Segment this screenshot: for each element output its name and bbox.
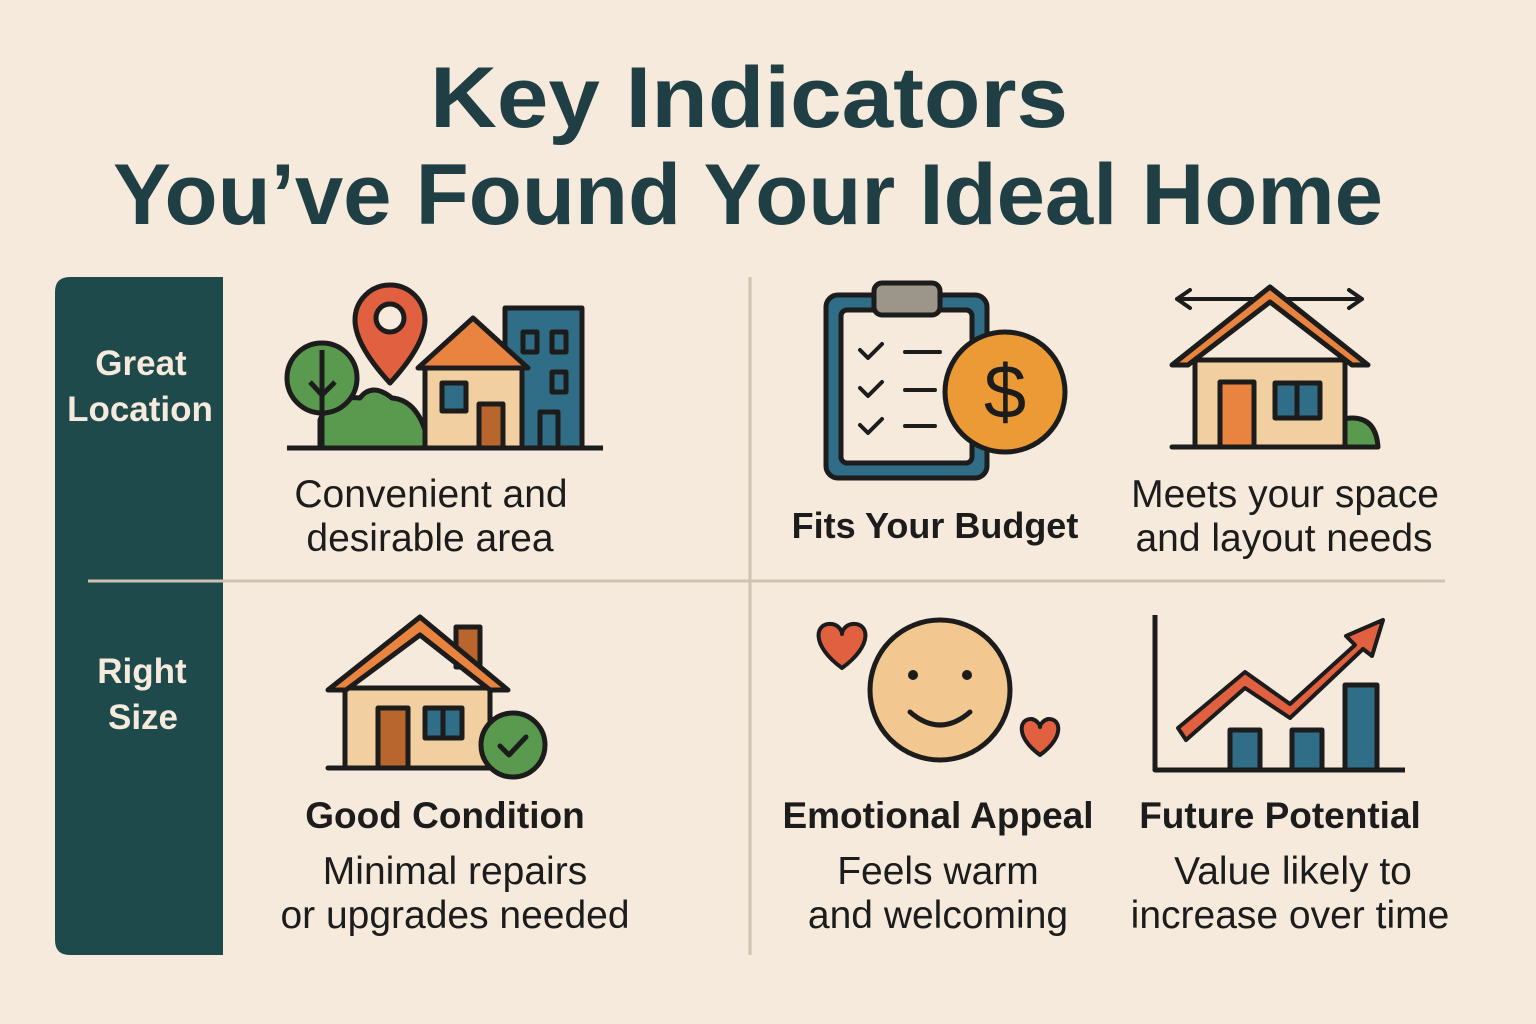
sidebar label: great location: Great [95, 344, 187, 383]
icon: chart [1155, 615, 1405, 770]
text: Minimal repairs [323, 850, 587, 893]
text: space [1131, 473, 1439, 560]
text: and welcoming [808, 894, 1068, 937]
text: Feels warm [837, 850, 1039, 893]
icon: smiley [819, 620, 1058, 760]
text: space: Meets your space [1131, 473, 1439, 516]
text: convenient [294, 473, 568, 560]
text: convenient: Convenient and [294, 473, 568, 516]
text: good condition: Good Condition [305, 795, 585, 836]
sidebar label: right size: Right [97, 652, 187, 691]
text: emotional: Emotional Appeal [782, 795, 1094, 836]
sidebar label: right size [97, 652, 187, 737]
text: convenient: desirable area [306, 517, 554, 560]
title: You’ve Found Your Ideal Home [113, 147, 1383, 243]
icon: budget [826, 283, 1065, 478]
sidebar label: right size: Size [108, 698, 178, 737]
text: budget: Fits Your Budget [792, 505, 1078, 546]
title [113, 50, 1383, 243]
sidebar label: great location: Location [67, 390, 213, 429]
text: increase over time [1131, 894, 1449, 937]
sidebar label: great location [67, 344, 213, 429]
text: Value likely to [1174, 850, 1412, 893]
dollar sign: $ [984, 350, 1026, 435]
icon: space [1172, 287, 1378, 447]
icon: good condition [328, 617, 545, 777]
icon: location [287, 285, 603, 448]
sidebar [55, 277, 223, 955]
text: or upgrades needed [280, 894, 630, 937]
title: Key Indicators [430, 50, 1068, 146]
text: future: Future Potential [1139, 795, 1421, 836]
text: space: and layout needs [1135, 517, 1433, 560]
